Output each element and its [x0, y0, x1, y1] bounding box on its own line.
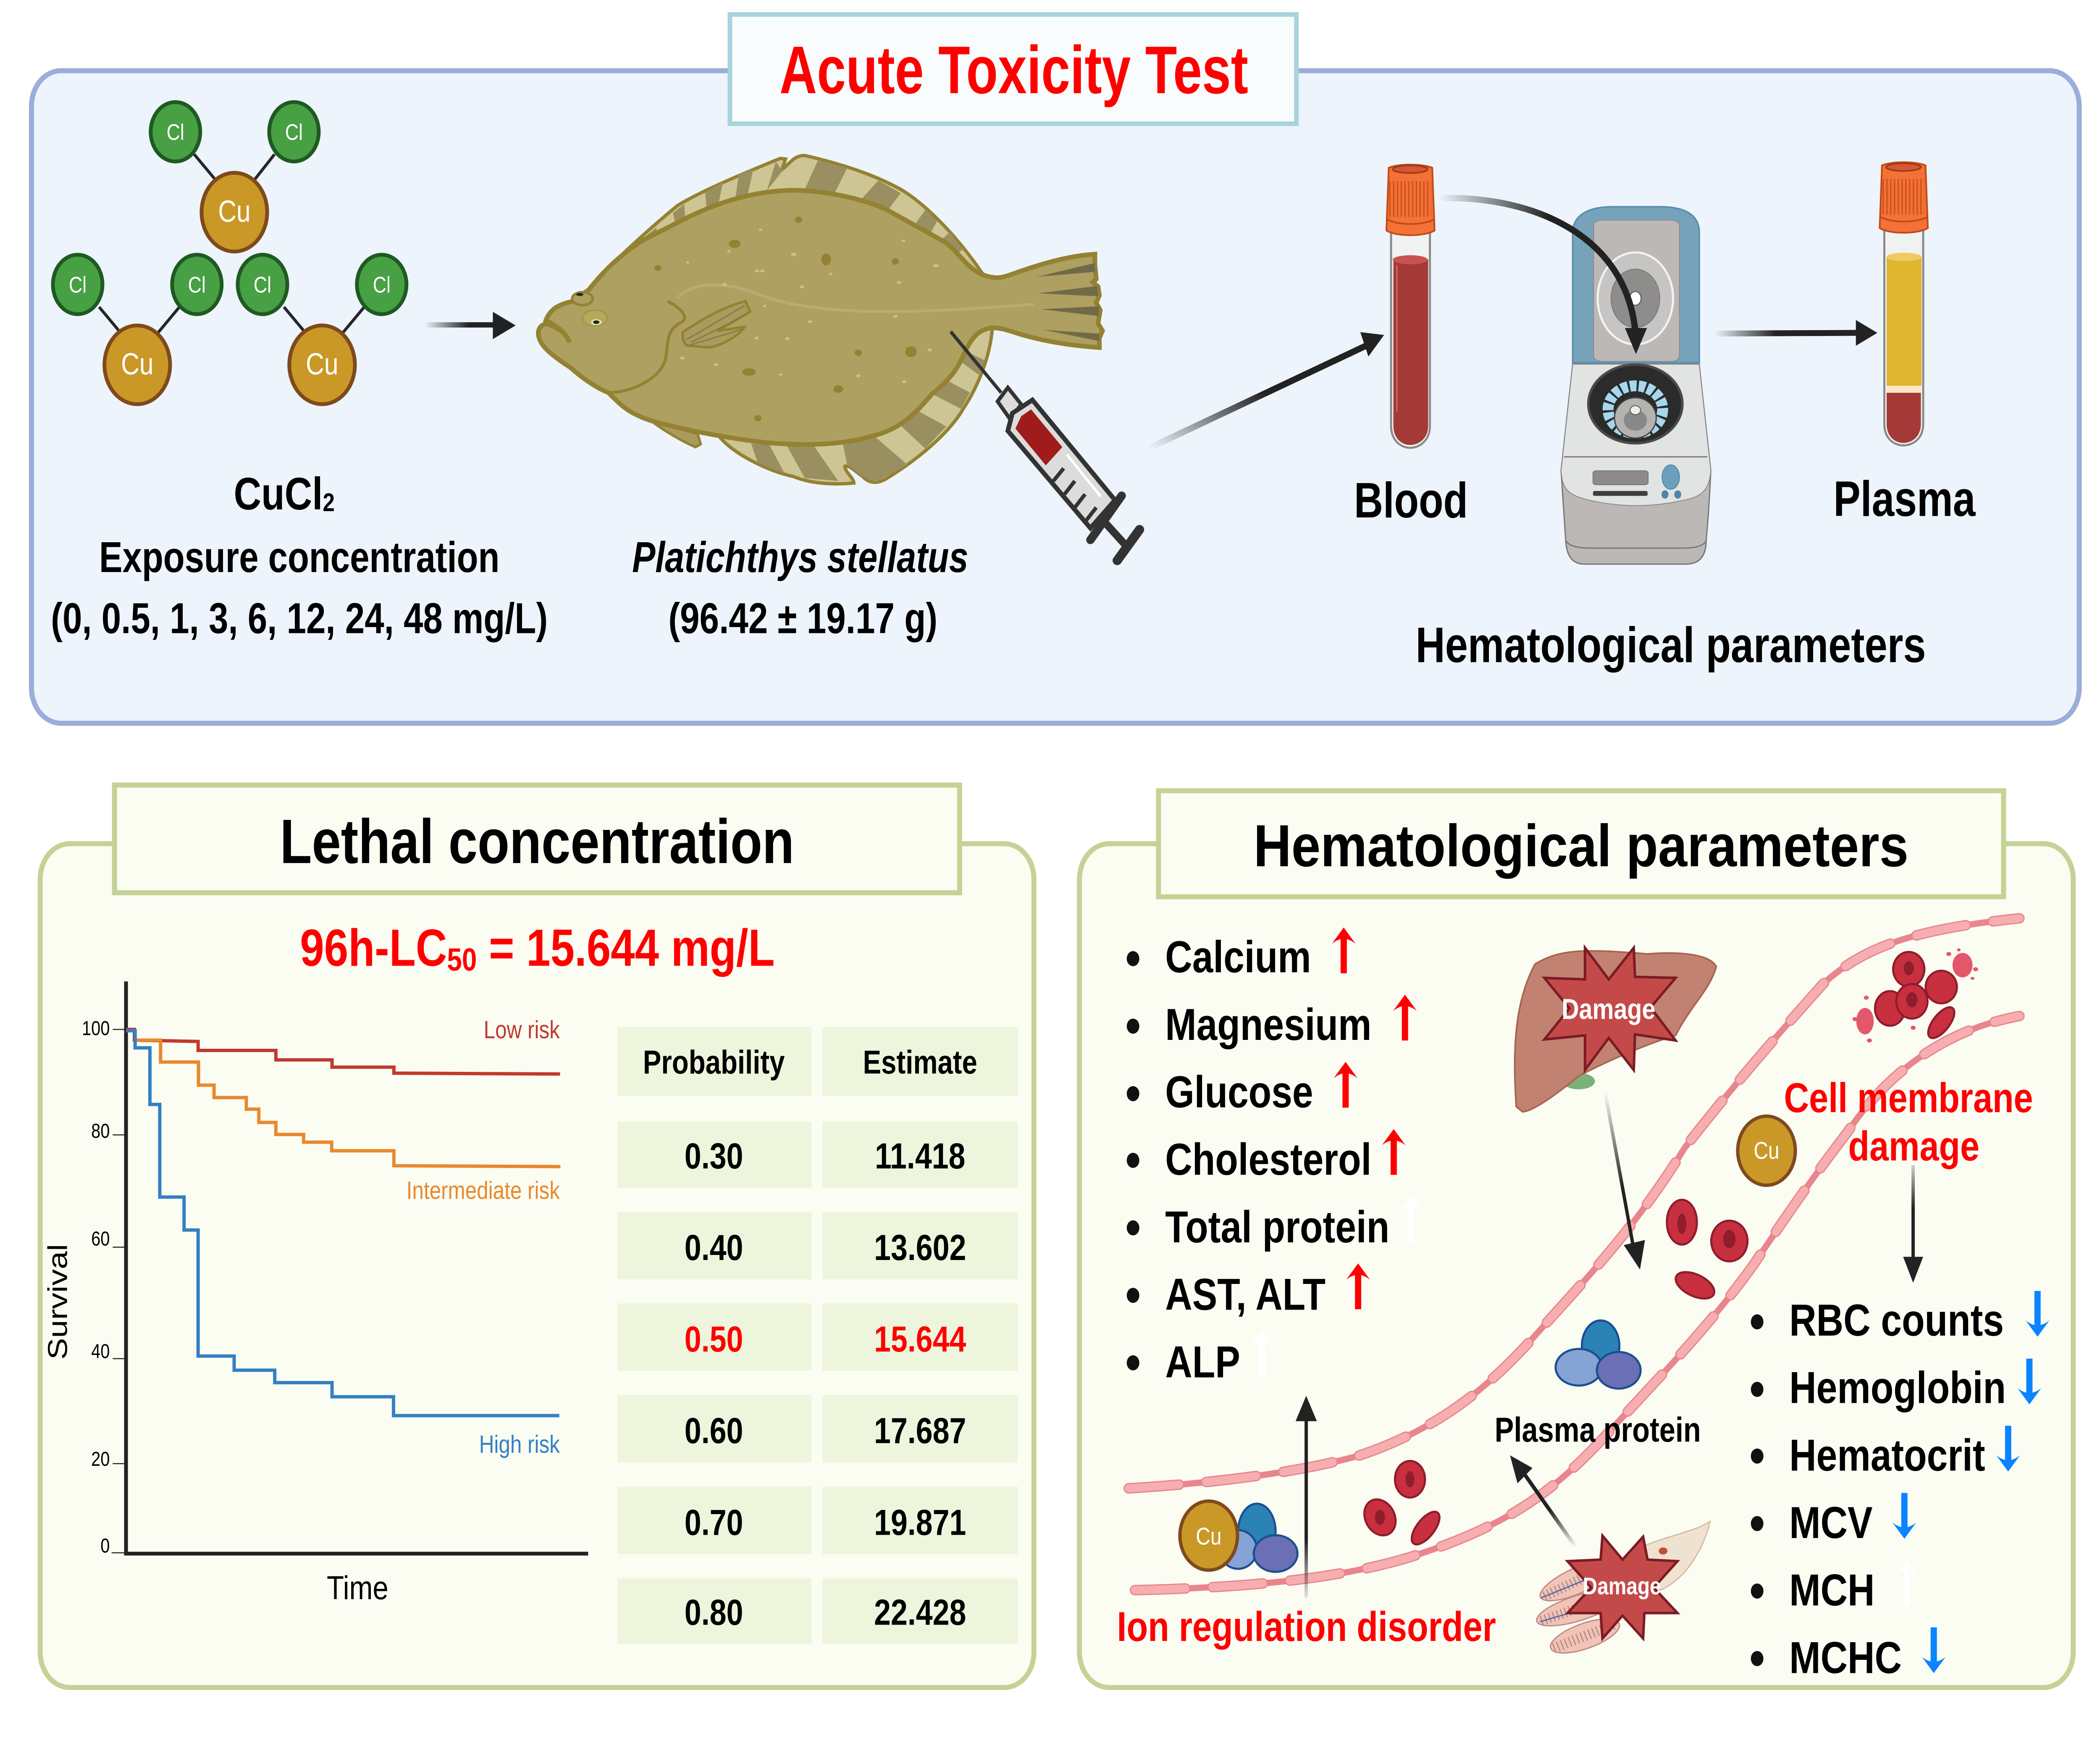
text: species: (96.42 ± 19.17 g) — [668, 594, 937, 643]
list: increased parameters: Glucose — [1165, 1067, 1313, 1117]
lateral line — [677, 285, 1034, 312]
list: decreased parameters: Hematocrit — [1789, 1430, 1985, 1480]
arrow: blood to centrifuge — [1439, 198, 1647, 354]
icon: syringe — [951, 332, 1139, 561]
table: probability and estimate: 19.871 — [874, 1502, 966, 1543]
arrow: fish to blood — [1149, 332, 1384, 448]
series labels: Intermediate risk — [407, 1176, 560, 1205]
arrow: cell membrane damage to RBC list — [1903, 1165, 1923, 1283]
arrow: gill to plasma protein — [1510, 1455, 1575, 1547]
table: probability and estimate — [617, 1027, 1018, 1644]
eyes — [572, 292, 593, 305]
title box: acute toxicity test: Acute Toxicity Test — [780, 32, 1248, 108]
fins — [591, 155, 992, 484]
tick labels — [82, 1017, 110, 1557]
title box: lethal concentration — [115, 785, 960, 893]
table: probability and estimate: 0.80 — [685, 1592, 743, 1633]
icon: CuCl2 molecules: Cl — [254, 273, 271, 297]
arrow: ion regulation up — [1296, 1396, 1317, 1598]
label: Plasma: Plasma — [1833, 471, 1976, 527]
tick labels: 40 — [91, 1340, 110, 1362]
list: decreased parameters: MCHC — [1789, 1633, 1902, 1683]
tick labels: 0 — [100, 1535, 110, 1557]
list: increased parameters: ALP — [1165, 1337, 1240, 1387]
panel: lethal concentration — [40, 785, 1034, 1688]
icon: CuCl2 molecules: Cl — [69, 273, 87, 297]
label: Blood: Blood — [1354, 473, 1468, 528]
list: decreased parameters: MCH — [1789, 1565, 1875, 1615]
icon: gill with damage — [1531, 1522, 1710, 1660]
table: probability and estimate: 0.50 — [685, 1319, 743, 1360]
axes — [126, 982, 588, 1554]
tick labels: 80 — [91, 1120, 110, 1142]
table: probability and estimate: 13.602 — [874, 1227, 966, 1268]
list: increased parameters: Total protein — [1165, 1202, 1389, 1252]
series labels: Low risk — [484, 1016, 560, 1044]
title box: acute toxicity test — [730, 14, 1297, 124]
list: increased parameters: Calcium — [1165, 932, 1311, 982]
tail rays — [1037, 263, 1100, 341]
table: probability and estimate: 17.687 — [874, 1410, 966, 1451]
axis labels: Time — [327, 1570, 388, 1606]
icon: centrifuge — [1561, 207, 1711, 564]
tick labels: 100 — [82, 1017, 110, 1040]
gill cover — [608, 301, 685, 393]
LC50 value: = 15.644 mg/L — [477, 919, 775, 977]
icon: liver with damage — [1515, 948, 1716, 1112]
label: ion regulation disorder: Ion regulation disorder — [1117, 1604, 1496, 1650]
label: plasma protein: Plasma protein — [1495, 1411, 1701, 1449]
spots — [654, 216, 917, 422]
body — [538, 190, 1102, 444]
icon: flounder fish — [538, 155, 1102, 484]
text: CuCl2 exposure: (0, 0.5, 1, 3, 6, 12, 24, 48 mg/L) — [51, 594, 548, 643]
survival chart — [42, 982, 588, 1606]
tick labels: 60 — [91, 1228, 110, 1250]
arrow: molecules to fish — [425, 312, 516, 339]
icon: plasma protein — [1556, 1320, 1641, 1389]
label: cell membrane damage: damage — [1848, 1123, 1979, 1169]
table: probability and estimate: 11.418 — [875, 1136, 965, 1176]
arrow: liver to plasma protein — [1605, 1092, 1645, 1270]
text: species: Platichthys stellatus — [632, 533, 968, 582]
list: decreased parameters — [1751, 1291, 2050, 1683]
table: probability and estimate: 22.428 — [874, 1592, 966, 1633]
panel: acute toxicity test — [32, 14, 2079, 723]
red blood cells — [1360, 948, 1978, 1548]
list: increased parameters — [1127, 927, 1423, 1387]
icon: copper and protein complex: Cu — [1196, 1523, 1221, 1550]
high risk line — [126, 1031, 559, 1416]
series labels: High risk — [479, 1431, 560, 1458]
list: decreased parameters: Hemoglobin — [1789, 1362, 2006, 1412]
table: probability and estimate: 0.60 — [685, 1410, 743, 1451]
arrow: centrifuge to plasma — [1715, 320, 1877, 346]
icon: plasma tube — [1880, 162, 1928, 445]
table: probability and estimate: 15.644 — [874, 1319, 966, 1360]
label: Hematological parameters: Hematological parameters — [1416, 617, 1926, 673]
ventral fin — [651, 420, 701, 447]
intermediate risk line — [134, 1040, 560, 1167]
table: probability and estimate: Estimate — [863, 1045, 977, 1081]
icon: CuCl2 molecules: Cl — [285, 120, 303, 145]
axis labels — [42, 1244, 388, 1606]
title box: hematological parameters: Hematological parameters — [1254, 812, 1908, 879]
blood vessel — [1129, 918, 2019, 1590]
title box: hematological parameters — [1158, 791, 2003, 897]
text: CuCl2 exposure: CuCl — [234, 468, 323, 520]
text: CuCl2 exposure: 2 — [323, 488, 335, 517]
icon: CuCl2 molecules: Cu — [218, 194, 251, 228]
label: cell membrane damage — [1784, 1075, 2033, 1169]
icon: CuCl2 molecules — [53, 102, 407, 404]
icon: free copper — [1738, 1116, 1796, 1185]
table: probability and estimate: 0.70 — [685, 1502, 743, 1543]
icon: blood tube — [1386, 165, 1435, 448]
low risk line — [126, 1029, 560, 1074]
icon: liver with damage: Damage — [1562, 993, 1655, 1025]
icon: CuCl2 molecules: Cl — [188, 273, 206, 297]
icon: CuCl2 molecules: Cl — [373, 273, 391, 297]
list: increased parameters: AST, ALT — [1165, 1269, 1326, 1319]
table: probability and estimate: Probability — [643, 1045, 785, 1081]
title box: lethal concentration: Lethal concentration — [280, 807, 794, 877]
icon: CuCl2 molecules: Cl — [167, 120, 184, 145]
icon: CuCl2 molecules: Cu — [306, 347, 339, 381]
text: CuCl2 exposure: Exposure concentration — [99, 533, 499, 582]
icon: gill with damage: Damage — [1583, 1573, 1661, 1600]
icon: copper and protein complex — [1180, 1501, 1297, 1572]
series labels — [407, 1016, 560, 1458]
label: cell membrane damage: Cell membrane — [1784, 1075, 2033, 1121]
down arrows — [1893, 1291, 2050, 1673]
text: species — [632, 533, 968, 643]
table: probability and estimate: 0.40 — [685, 1227, 743, 1268]
tick labels: 20 — [91, 1448, 110, 1470]
icon: free copper: Cu — [1754, 1137, 1780, 1164]
text: CuCl2 exposure — [51, 468, 548, 643]
list: increased parameters: Cholesterol — [1165, 1134, 1371, 1184]
table: probability and estimate: 0.30 — [685, 1136, 743, 1176]
list: decreased parameters: MCV — [1789, 1497, 1873, 1548]
panel: hematological parameters — [1079, 791, 2073, 1688]
axis labels: Survival — [42, 1244, 73, 1360]
list: increased parameters: Magnesium — [1165, 999, 1371, 1050]
LC50 value: 96h-LC — [300, 919, 447, 977]
icon: CuCl2 molecules: Cu — [121, 347, 154, 381]
list: decreased parameters: RBC counts — [1789, 1295, 2004, 1345]
pectoral fin — [682, 301, 750, 347]
LC50 value: 50 — [447, 942, 477, 978]
up arrows — [1250, 927, 1423, 1376]
